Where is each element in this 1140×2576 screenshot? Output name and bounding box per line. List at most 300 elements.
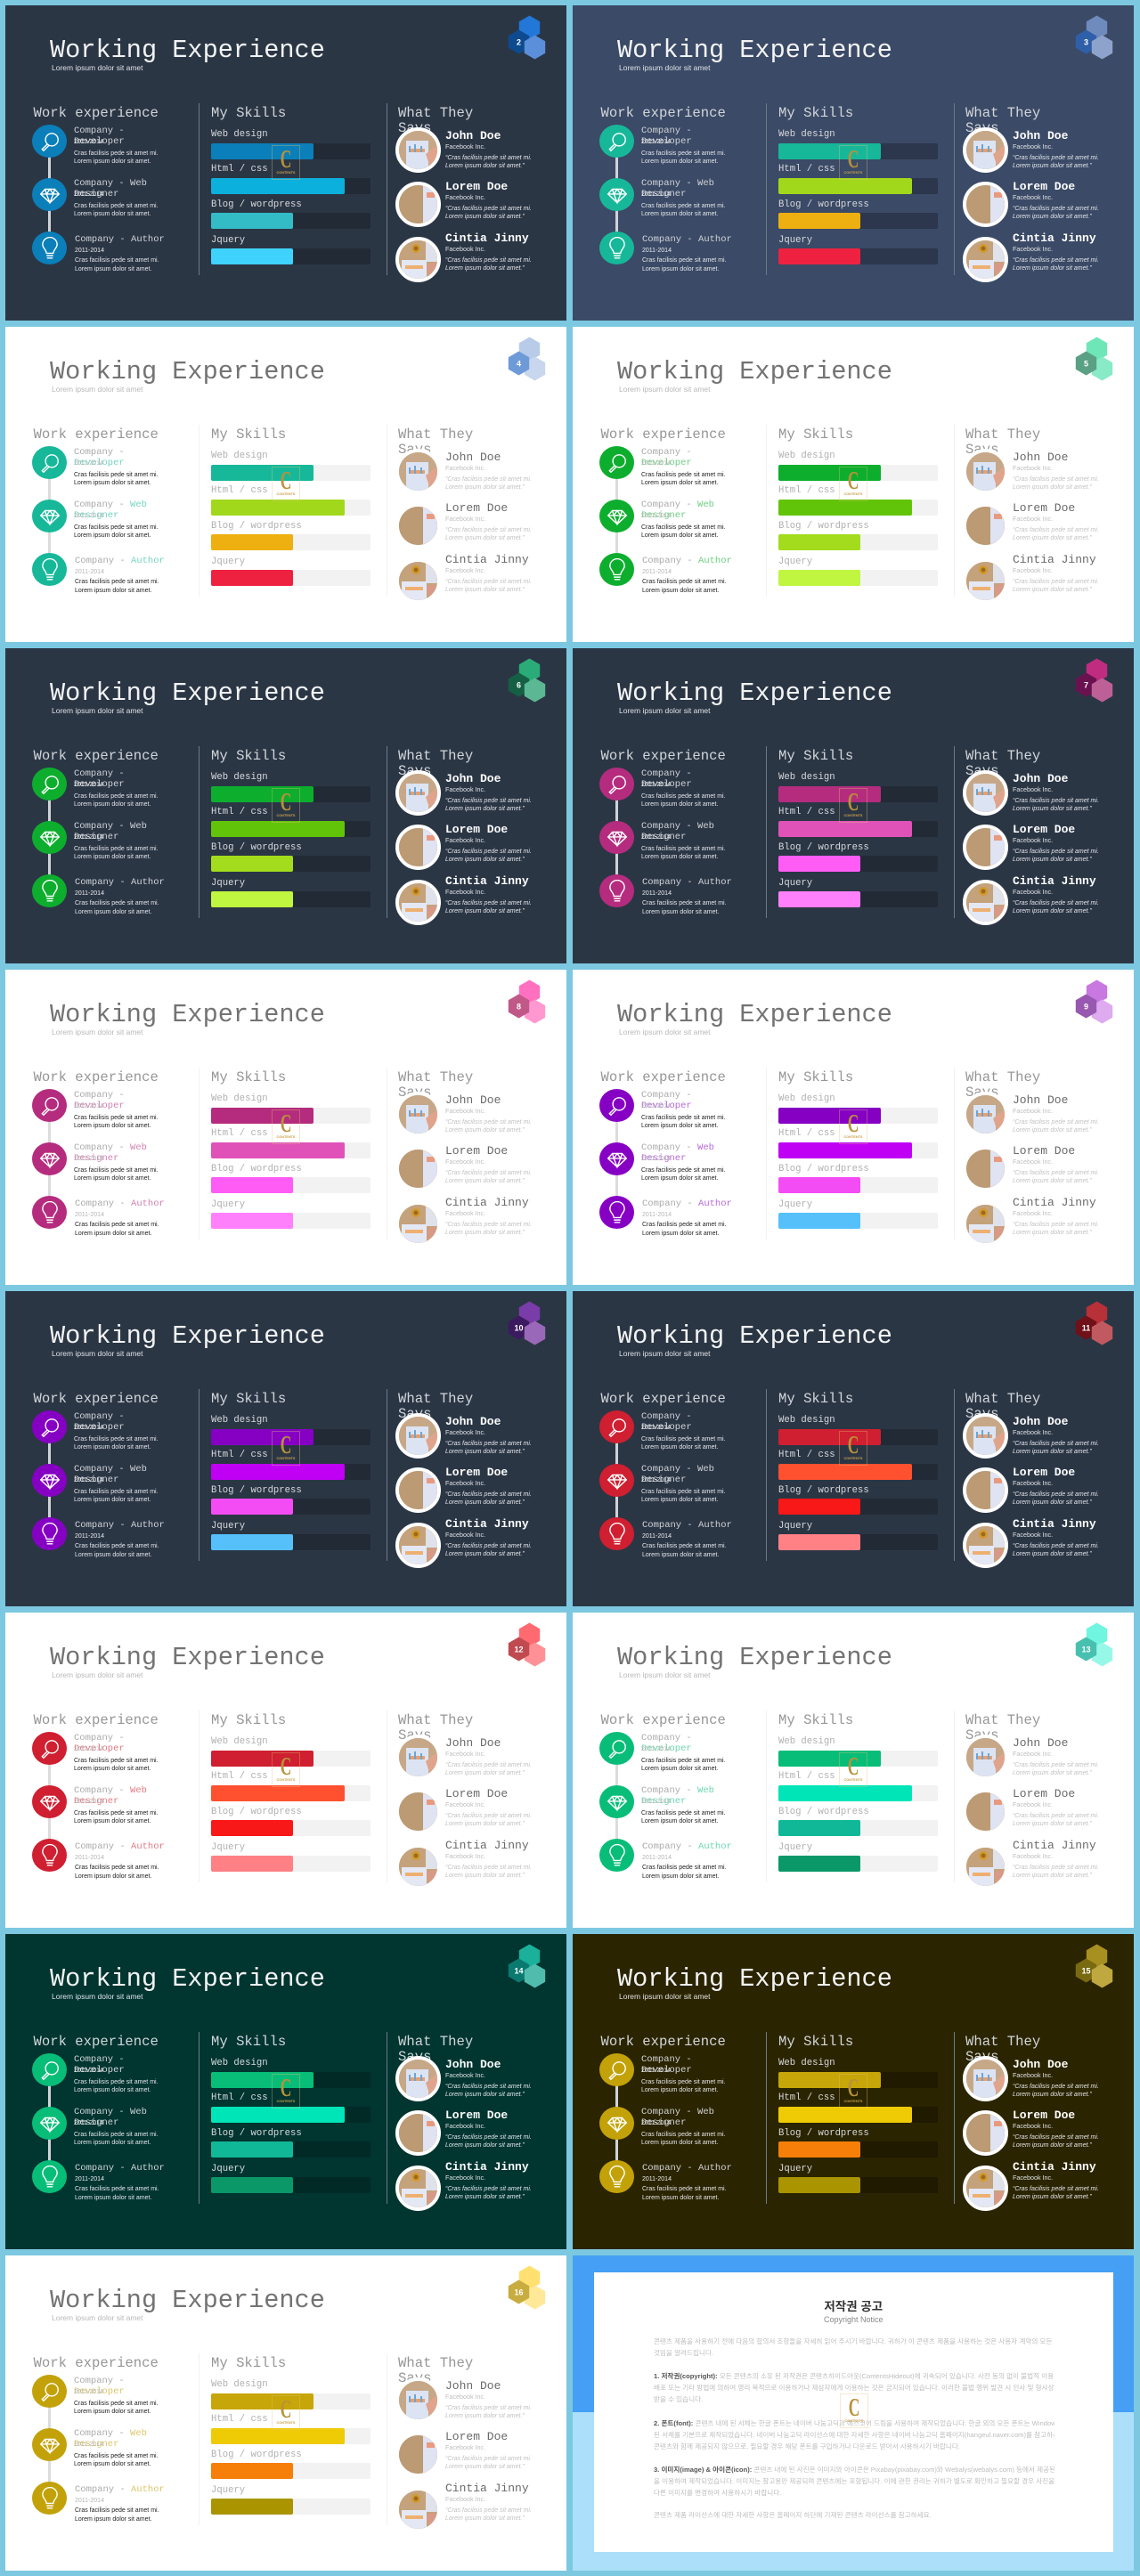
work item: author: Company - Author	[75, 876, 165, 887]
timeline connector	[615, 2081, 618, 2170]
skill bar: html css	[211, 485, 370, 516]
heading: work experience: Work experience	[600, 1391, 726, 1407]
subtitle: Lorem ipsum dolor sit amet	[619, 1992, 711, 2001]
work item: developer: Cras facilisis pede sit amet mi.	[74, 150, 159, 157]
subtitle: Lorem ipsum dolor sit amet	[52, 1670, 143, 1679]
work item: author	[32, 553, 165, 593]
testimonial: john doe: John Doe	[1013, 451, 1068, 464]
title: Working Experience	[617, 679, 892, 708]
divider	[953, 1389, 955, 1561]
skill bar: blog wordpress	[211, 1163, 370, 1193]
testimonial: john doe: Lorem ipsum dolor sit amet.”	[1013, 1770, 1092, 1776]
testimonial: john doe: John Doe	[445, 2379, 501, 2393]
testimonial: cintia jinny: Facebook Inc.	[445, 1209, 485, 1216]
skill bar: jquery	[211, 2484, 370, 2515]
testimonial: lorem doe: Lorem Doe	[445, 2109, 508, 2122]
testimonial: lorem doe: “Cras facilisis pede sit amet mi.	[1013, 1491, 1099, 1498]
testimonial: cintia jinny	[963, 2161, 1110, 2212]
work item: author: Cras facilisis pede sit amet mi.	[75, 2507, 159, 2514]
panel: slide 4	[5, 327, 566, 642]
work item: web designer: Company - Web Designer	[641, 500, 714, 520]
work item: developer	[599, 768, 742, 812]
skill bar: web design: Web design	[778, 1736, 835, 1747]
work item: developer	[599, 446, 726, 486]
work item: web designer	[599, 178, 726, 217]
divider	[766, 1068, 767, 1239]
work item: web designer: Cras facilisis pede sit amet mi.	[641, 1166, 726, 1174]
skill bar: blog wordpress	[211, 842, 370, 873]
work item: author: Cras facilisis pede sit amet mi.	[642, 900, 727, 906]
testimonial: lorem doe: Lorem Doe	[1013, 501, 1075, 515]
subtitle: Lorem ipsum dolor sit amet	[52, 2313, 143, 2322]
testimonial: lorem doe: Lorem ipsum dolor sit amet.”	[445, 2142, 525, 2149]
testimonial: john doe: Lorem ipsum dolor sit amet.”	[1013, 1449, 1092, 1455]
icon: page number hexagons: 11	[1082, 1323, 1090, 1332]
testimonial: lorem doe	[395, 1467, 542, 1517]
work item: web designer: Lorem ipsum dolor sit amet.	[74, 1818, 151, 1824]
heading: my skills: My Skills	[778, 427, 853, 443]
skill bar: web design: Web design	[778, 451, 835, 461]
watermark	[272, 1431, 300, 1466]
heading: work experience: Work experience	[34, 427, 159, 443]
testimonial: lorem doe	[395, 2431, 542, 2482]
timeline connector	[48, 795, 51, 884]
work item: author	[599, 874, 742, 919]
icon: page number hexagons: 4	[517, 360, 521, 369]
work item: developer: Company - Developer	[641, 1411, 692, 1432]
testimonial: cintia jinny: Facebook Inc.	[1013, 2173, 1053, 2182]
work item: web designer: Cras facilisis pede sit amet mi.	[74, 203, 159, 208]
skill bar: html css: Html / css	[778, 1771, 835, 1782]
divider	[953, 103, 955, 275]
work item: developer: Cras facilisis pede sit amet mi.	[641, 1115, 726, 1120]
skill bar: web design: Web design	[778, 1415, 835, 1426]
skill bar: jquery	[778, 1841, 938, 1872]
divider	[953, 425, 955, 597]
watermark: C	[281, 145, 291, 174]
skill bar: html css: Html / css	[211, 2414, 268, 2425]
watermark: CONTENTS	[844, 814, 862, 817]
work item: web designer: 2011-2014	[641, 513, 671, 518]
testimonial: john doe: John Doe	[445, 1093, 501, 1107]
skill bar: html css	[211, 1450, 370, 1480]
testimonial: lorem doe: Lorem Doe	[445, 1787, 508, 1800]
work item: author: Cras facilisis pede sit amet mi.	[75, 1865, 159, 1871]
work item: developer: Lorem ipsum dolor sit amet.	[74, 1123, 151, 1129]
work item: developer: Company - Developer	[641, 1090, 692, 1111]
work item: developer: Cras facilisis pede sit amet mi.	[641, 472, 726, 477]
skill bar: html css: Html / css	[211, 164, 268, 175]
divider	[953, 746, 955, 918]
work item: web designer: Company - Web Designer	[74, 2107, 147, 2128]
work item: web designer: Cras facilisis pede sit amet mi.	[641, 2132, 726, 2137]
work item: developer: 2011-2014	[74, 782, 103, 787]
work item: developer	[599, 2053, 742, 2098]
skill bar: html css: Html / css	[778, 1128, 835, 1139]
watermark: CONTENTS	[277, 1778, 295, 1782]
icon: page number hexagons: 15	[1081, 1966, 1091, 1975]
divider	[199, 425, 200, 597]
work item: web designer	[32, 2107, 175, 2151]
icon: page number hexagons	[504, 657, 549, 711]
subtitle: Lorem ipsum dolor sit amet	[619, 63, 711, 72]
testimonial: lorem doe: Lorem Doe	[1013, 1787, 1075, 1800]
work item: developer: Cras facilisis pede sit amet mi.	[641, 2078, 726, 2085]
skill bar: web design	[211, 2058, 370, 2088]
icon: page number hexagons	[1071, 1621, 1116, 1675]
testimonial: john doe: John Doe	[445, 1736, 501, 1750]
testimonial: lorem doe: Lorem ipsum dolor sit amet.”	[445, 1178, 525, 1184]
work item: web designer: Company - Web Designer	[641, 178, 714, 199]
work item: author: Cras facilisis pede sit amet mi.	[75, 579, 159, 585]
work item: developer: Company - Developer	[641, 768, 692, 789]
testimonial: cintia jinny: Lorem ipsum dolor sit amet.”	[1013, 1873, 1092, 1879]
testimonial: john doe: Facebook Inc.	[445, 2071, 485, 2078]
heading: work experience: Work experience	[34, 1391, 159, 1407]
testimonial: john doe	[963, 2056, 1110, 2107]
work item: developer: Lorem ipsum dolor sit amet.	[641, 1444, 718, 1451]
watermark	[272, 145, 300, 180]
skill bar: html css	[211, 807, 370, 837]
work item: author: Company - Author	[75, 2162, 165, 2173]
work item: author	[32, 1517, 175, 1562]
work item: web designer: Cras facilisis pede sit amet mi.	[74, 1809, 159, 1816]
testimonial: john doe: Facebook Inc.	[1013, 463, 1053, 472]
testimonial: lorem doe: Lorem ipsum dolor sit amet.”	[445, 535, 525, 541]
work item: developer: Company - Developer	[74, 126, 125, 146]
skill bar: blog wordpress	[778, 1806, 938, 1836]
work item: developer: Company - Developer	[641, 2054, 692, 2075]
work item: web designer: 2011-2014	[641, 1799, 671, 1804]
work item: author: Lorem ipsum dolor sit amet.	[75, 588, 151, 593]
work item: author: 2011-2014	[75, 890, 104, 896]
heading: my skills: My Skills	[211, 427, 286, 443]
work item: author: Cras facilisis pede sit amet mi.	[75, 1222, 159, 1228]
work item: developer	[32, 446, 159, 486]
notice card	[593, 2272, 1113, 2552]
work item: author: Company - Author	[642, 2162, 732, 2173]
work item: author: Cras facilisis pede sit amet mi.	[642, 1543, 727, 1549]
skill bar: web design	[778, 1093, 938, 1124]
skill bar: html css	[778, 1450, 938, 1480]
testimonial: cintia jinny: Facebook Inc.	[445, 2173, 485, 2182]
work item: developer: Cras facilisis pede sit amet mi.	[641, 792, 726, 800]
work item: author	[599, 1839, 742, 1883]
skill bar: jquery	[211, 878, 370, 908]
skill bar: jquery: Jquery	[211, 878, 245, 889]
work item: web designer: Cras facilisis pede sit amet mi.	[74, 846, 159, 851]
skill bar: blog wordpress	[211, 1485, 370, 1516]
subtitle: Lorem ipsum dolor sit amet	[619, 706, 711, 715]
testimonial: lorem doe	[395, 824, 542, 874]
title: Working Experience	[50, 1000, 325, 1029]
work item: developer	[599, 125, 726, 165]
testimonial: lorem doe: Lorem Doe	[1013, 180, 1075, 193]
skill bar: jquery: Jquery	[211, 556, 245, 566]
work item: author: Company - Author	[642, 1841, 732, 1852]
testimonial: john doe: Facebook Inc.	[1013, 1428, 1053, 1435]
watermark	[839, 788, 867, 823]
testimonial: cintia jinny: “Cras facilisis pede sit amet mi.	[445, 899, 532, 906]
work item: web designer: Lorem ipsum dolor sit amet.	[641, 2140, 718, 2146]
skill bar: blog wordpress	[778, 2128, 938, 2158]
skill bar: html css: Html / css	[211, 485, 268, 496]
testimonial: cintia jinny	[395, 2483, 542, 2533]
testimonial: cintia jinny: Lorem ipsum dolor sit amet.”	[445, 265, 525, 272]
testimonial: john doe: Lorem ipsum dolor sit amet.”	[1013, 163, 1092, 169]
work item: author: 2011-2014	[75, 1854, 104, 1861]
watermark: C	[281, 788, 291, 817]
testimonial: cintia jinny: Lorem ipsum dolor sit amet.”	[445, 1873, 525, 1879]
title: Working Experience	[617, 1321, 892, 1351]
work item: web designer: 2011-2014	[74, 1799, 103, 1804]
work item: web designer: Cras facilisis pede sit amet mi.	[74, 1489, 159, 1494]
heading: what they says: What They Says	[398, 427, 473, 458]
skill bar: blog wordpress	[778, 1485, 938, 1516]
work item: developer: 2011-2014	[641, 1425, 671, 1430]
testimonial: lorem doe: Facebook Inc.	[445, 2121, 485, 2130]
panel: slide 7	[573, 648, 1134, 963]
work item: author: 2011-2014	[642, 568, 672, 575]
testimonial: cintia jinny	[395, 232, 532, 282]
watermark: C	[848, 2074, 859, 2102]
work item: author: Lorem ipsum dolor sit amet.	[642, 265, 719, 272]
work item: developer: 2011-2014	[74, 1745, 103, 1752]
work item: developer: Cras facilisis pede sit amet mi.	[74, 792, 159, 800]
testimonial: lorem doe	[963, 180, 1099, 227]
testimonial: cintia jinny: Lorem ipsum dolor sit amet.”	[445, 587, 525, 593]
heading: work experience: Work experience	[34, 1712, 159, 1728]
heading: my skills: My Skills	[778, 1391, 853, 1407]
testimonial: cintia jinny	[395, 1197, 542, 1247]
skill bar: blog wordpress	[778, 199, 938, 229]
watermark: CONTENTS	[277, 1135, 295, 1139]
testimonial: lorem doe: Lorem ipsum dolor sit amet.”	[445, 1499, 525, 1506]
watermark: CONTENTS	[844, 1135, 862, 1139]
watermark: C	[849, 2393, 859, 2422]
work item: author: 2011-2014	[642, 1533, 672, 1539]
work item: developer: 2011-2014	[74, 139, 103, 144]
heading: work experience: Work experience	[34, 105, 159, 121]
intro paragraph: 것임을 알려드립니다.	[654, 2349, 713, 2356]
testimonial: cintia jinny	[395, 1840, 542, 1890]
work item: web designer	[32, 500, 159, 539]
skill bar: blog wordpress: Blog / wordpress	[778, 1163, 869, 1174]
work item: developer	[32, 1410, 175, 1455]
testimonial: lorem doe	[963, 2109, 1110, 2160]
testimonial: john doe: “Cras facilisis pede sit amet mi.	[445, 1118, 532, 1125]
heading: my skills: My Skills	[778, 2034, 853, 2050]
watermark: C	[848, 145, 859, 174]
work item: developer: 2011-2014	[641, 459, 671, 467]
skill bar: web design: Web design	[778, 772, 835, 783]
testimonial: cintia jinny: “Cras facilisis pede sit amet mi.	[1013, 1222, 1099, 1227]
work item: web designer	[32, 1464, 175, 1508]
work item: web designer: Company - Web Designer	[74, 2428, 147, 2449]
skill bar: html css: Html / css	[778, 807, 835, 817]
work item: web designer	[32, 1785, 175, 1830]
work item: author: Company - Author	[75, 1841, 165, 1852]
skill bar: blog wordpress	[211, 2449, 370, 2479]
testimonial: cintia jinny: Cintia Jinny	[445, 1196, 529, 1209]
testimonial: john doe: Lorem ipsum dolor sit amet.”	[445, 1127, 525, 1134]
panel: slide 13	[573, 1613, 1134, 1928]
work item: web designer: Company - Web Designer	[74, 500, 147, 520]
testimonial: cintia jinny: Lorem ipsum dolor sit amet.”	[445, 1551, 525, 1557]
divider	[766, 1389, 767, 1561]
work item: author: Cras facilisis pede sit amet mi.	[75, 2186, 159, 2192]
skill bar: web design: Web design	[211, 1093, 268, 1104]
icon: page number hexagons	[504, 1300, 549, 1353]
panel: slide 8	[5, 970, 566, 1285]
testimonial: cintia jinny: “Cras facilisis pede sit amet mi.	[445, 1222, 532, 1227]
heading: what they says: What They Says	[965, 1391, 1040, 1422]
testimonial: cintia jinny: Cintia Jinny	[1013, 874, 1096, 888]
panel: slide 2	[5, 5, 566, 321]
testimonial: lorem doe: Lorem ipsum dolor sit amet.”	[1013, 535, 1092, 541]
work item: developer	[32, 2053, 175, 2098]
work item: developer	[32, 768, 175, 812]
skill bar: html css: Html / css	[211, 1128, 268, 1139]
watermark: CONTENTS	[277, 814, 295, 817]
heading: what they says: What They Says	[965, 105, 1040, 136]
skill bar: web design	[778, 129, 938, 159]
testimonial: cintia jinny: Facebook Inc.	[1013, 1209, 1053, 1216]
skill bar: jquery	[211, 235, 370, 264]
watermark: CONTENTS	[277, 492, 295, 496]
testimonial: lorem doe: Lorem Doe	[445, 180, 508, 193]
title: Working Experience	[617, 36, 892, 65]
heading: what they says: What They Says	[398, 1391, 473, 1422]
work item: developer: 2011-2014	[74, 2068, 103, 2073]
watermark: CONTENTS	[277, 171, 295, 175]
work item: web designer: Lorem ipsum dolor sit amet.	[74, 2461, 151, 2467]
intro paragraph	[654, 2335, 1054, 2358]
work item: web designer: Company - Web Designer	[641, 821, 714, 842]
work item: developer	[32, 1089, 175, 1134]
work item: developer: Company - Developer	[641, 1733, 692, 1754]
work item: author: Company - Author	[642, 556, 732, 566]
testimonial: lorem doe: Facebook Inc.	[1013, 1158, 1053, 1165]
work item: developer: Cras facilisis pede sit amet mi.	[74, 472, 159, 477]
testimonial: john doe: John Doe	[1013, 2058, 1068, 2071]
work item: author: Lorem ipsum dolor sit amet.	[75, 265, 151, 272]
work item: author: 2011-2014	[75, 1533, 104, 1539]
work item: web designer	[599, 1785, 742, 1830]
work item: web designer: 2011-2014	[74, 513, 103, 518]
testimonial: john doe: Facebook Inc.	[445, 1106, 485, 1115]
icon: page number hexagons	[508, 337, 545, 381]
testimonial: john doe: John Doe	[445, 772, 501, 785]
work item: web designer: Cras facilisis pede sit amet mi.	[641, 524, 726, 531]
work item: web designer	[599, 821, 742, 865]
work item: developer: Company - Developer	[74, 1733, 125, 1754]
panel: slide 9	[573, 970, 1134, 1285]
title: Working Experience	[50, 1321, 325, 1351]
testimonial: lorem doe: “Cras facilisis pede sit amet mi.	[445, 2456, 532, 2461]
title: Working Experience	[50, 357, 325, 386]
work item: developer: 2011-2014	[641, 139, 671, 144]
testimonial: john doe: Lorem ipsum dolor sit amet.”	[445, 2092, 525, 2098]
timeline connector	[48, 152, 51, 241]
work item: web designer: Lorem ipsum dolor sit amet.	[74, 211, 151, 217]
testimonial: john doe: “Cras facilisis pede sit amet mi.	[445, 798, 532, 803]
testimonial: lorem doe: “Cras facilisis pede sit amet mi.	[445, 2133, 532, 2141]
skill bar: blog wordpress	[211, 2128, 370, 2158]
work item: developer: 2011-2014	[641, 782, 671, 787]
work item: author	[599, 1196, 742, 1240]
testimonial: cintia jinny: “Cras facilisis pede sit amet mi.	[1013, 1865, 1099, 1870]
testimonial: john doe: “Cras facilisis pede sit amet mi.	[1013, 1441, 1099, 1446]
timeline connector	[48, 1759, 51, 1849]
skill bar: blog wordpress	[211, 1806, 370, 1836]
testimonial: john doe: “Cras facilisis pede sit amet mi.	[445, 2404, 532, 2411]
testimonial: cintia jinny: Facebook Inc.	[1013, 1852, 1053, 1859]
testimonial: john doe	[395, 127, 532, 173]
testimonial: lorem doe	[963, 824, 1110, 874]
skill bar: blog wordpress: Blog / wordpress	[211, 199, 302, 210]
work item: web designer: Lorem ipsum dolor sit amet.	[74, 532, 151, 539]
testimonial: cintia jinny: Facebook Inc.	[445, 244, 485, 253]
skill bar: jquery	[211, 1841, 370, 1872]
testimonial: john doe: Facebook Inc.	[445, 785, 485, 792]
testimonial: cintia jinny: Facebook Inc.	[1013, 566, 1053, 573]
testimonial: john doe: Facebook Inc.	[1013, 1749, 1053, 1758]
skill bar: jquery: Jquery	[211, 2484, 245, 2495]
skill bar: web design: Web design	[211, 1736, 268, 1747]
title: Working Experience	[617, 357, 892, 386]
skill bar: html css: Html / css	[778, 1450, 835, 1460]
watermark	[839, 1752, 867, 1787]
work item: web designer: Company - Web Designer	[74, 1785, 147, 1806]
skill bar: blog wordpress: Blog / wordpress	[778, 199, 869, 210]
work item: author	[32, 232, 165, 272]
testimonial: lorem doe: Lorem Doe	[445, 1466, 508, 1479]
icon: page number hexagons	[504, 979, 549, 1032]
skill bar: html css	[778, 807, 938, 837]
work item: author: Cras facilisis pede sit amet mi.	[75, 257, 159, 264]
skill bar: blog wordpress: Blog / wordpress	[211, 842, 302, 853]
skill bar: web design	[778, 1415, 938, 1445]
skill bar: jquery	[211, 1521, 370, 1551]
divider	[953, 2032, 955, 2204]
skill bar: html css: Html / css	[778, 2092, 835, 2103]
icon: page number hexagons	[504, 1621, 549, 1675]
testimonial: cintia jinny: “Cras facilisis pede sit amet mi.	[1013, 2185, 1099, 2192]
work item: web designer: Company - Web Designer	[641, 2107, 714, 2128]
work item: author: Lorem ipsum dolor sit amet.	[642, 1873, 719, 1879]
skill bar: jquery	[211, 2164, 370, 2194]
skill bar: jquery	[778, 1199, 938, 1229]
testimonial: john doe: “Cras facilisis pede sit amet mi.	[1013, 1118, 1099, 1125]
work item: web designer: 2011-2014	[74, 833, 103, 841]
work item: author: Company - Author	[75, 1519, 165, 1530]
testimonial: cintia jinny	[963, 1197, 1110, 1247]
testimonial: lorem doe: Facebook Inc.	[445, 192, 485, 201]
testimonial: lorem doe	[395, 1145, 542, 1196]
panel: copyright notice	[573, 2255, 1134, 2571]
work item: author: Cras facilisis pede sit amet mi.	[642, 2186, 727, 2192]
heading: what they says: What They Says	[965, 427, 1040, 458]
watermark: CONTENTS	[844, 492, 862, 496]
work item: author: Company - Author	[642, 1199, 732, 1209]
divider	[199, 103, 200, 275]
skill bar: jquery	[778, 878, 938, 908]
paragraph: font	[654, 2417, 1054, 2452]
work item: web designer: Lorem ipsum dolor sit amet.	[74, 2140, 151, 2146]
testimonial: lorem doe: Lorem ipsum dolor sit amet.”	[445, 857, 525, 863]
testimonial: cintia jinny: Facebook Inc.	[445, 2495, 485, 2502]
